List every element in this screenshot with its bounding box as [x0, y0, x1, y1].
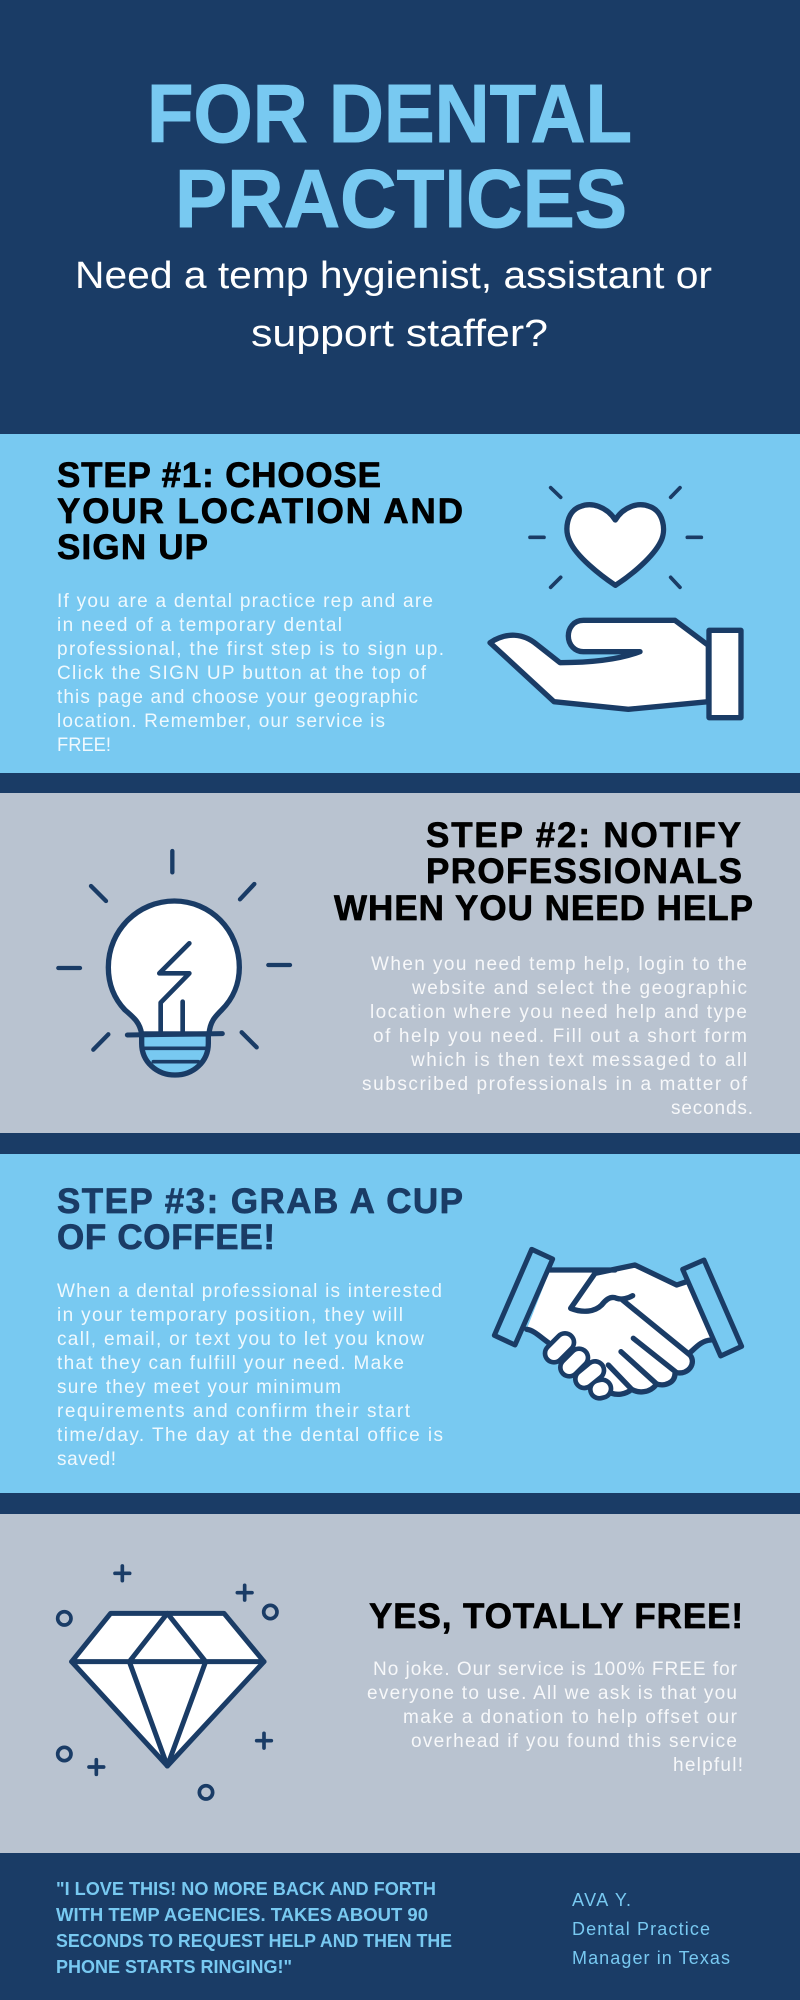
step 1 body text: location. Remember, our service is	[57, 711, 385, 732]
panel: header	[0, 0, 800, 434]
step 2 heading	[334, 816, 753, 928]
step 3 body text: When a dental professional is interested	[57, 1281, 442, 1302]
step 3 body text: requirements and confirm their start	[57, 1401, 411, 1422]
free body text: helpful!	[673, 1755, 743, 1776]
step 1 body text: Click the SIGN UP button at the top of	[57, 663, 427, 684]
step 2 body text: location where you need help and type	[370, 1002, 747, 1023]
testimonial quote: "I LOVE THIS! NO MORE BACK AND FORTH	[56, 1879, 436, 1899]
step 2 body text: which is then text messaged to all	[410, 1050, 747, 1071]
subtitle	[75, 255, 712, 355]
icon: light bulb	[58, 851, 290, 1075]
free body text: everyone to use. All we ask is that you	[367, 1683, 737, 1704]
testimonial author: AVA Y.	[572, 1890, 631, 1910]
testimonial author	[572, 1890, 730, 1968]
step 2 heading: WHEN YOU NEED HELP	[334, 889, 753, 928]
step 3 body text: time/day. The day at the dental office is	[57, 1425, 443, 1446]
step 3 body text: saved!	[57, 1449, 116, 1470]
step 2 body text: When you need temp help, login to the	[371, 954, 747, 975]
testimonial author: Dental Practice	[572, 1919, 710, 1939]
title: PRACTICES	[175, 152, 627, 245]
testimonial author: Manager in Texas	[572, 1948, 730, 1968]
step 1 heading	[57, 456, 463, 567]
testimonial quote: SECONDS TO REQUEST HELP AND THEN THE	[56, 1931, 452, 1951]
step 3 body text: sure they meet your minimum	[57, 1377, 341, 1398]
step 1 body text: If you are a dental practice rep and are	[57, 591, 433, 612]
free body text: make a donation to help offset our	[403, 1707, 738, 1728]
step 2 body text: seconds.	[671, 1098, 753, 1119]
step 1 heading: SIGN UP	[57, 528, 208, 567]
panel: totally free	[0, 1514, 800, 1853]
free heading: YES, TOTALLY FREE!	[369, 1597, 743, 1636]
step 2 body text	[362, 954, 753, 1119]
panel: step 3	[0, 1154, 800, 1493]
free body text: No joke. Our service is 100% FREE for	[373, 1659, 738, 1680]
step 3 heading	[57, 1182, 463, 1257]
step 1 body text: professional, the first step is to sign up.	[57, 639, 444, 660]
testimonial quote: WITH TEMP AGENCIES. TAKES ABOUT 90	[56, 1905, 428, 1925]
step 3 body text: that they can fulfill your need. Make	[57, 1353, 404, 1374]
step 1 heading: YOUR LOCATION AND	[57, 492, 463, 531]
step 3 heading: OF COFFEE!	[57, 1218, 275, 1257]
icon: hand holding heart	[490, 488, 741, 718]
panel: step 1	[0, 434, 800, 773]
step 3 body text: in your temporary position, they will	[57, 1305, 403, 1326]
step 1 heading: STEP #1: CHOOSE	[57, 456, 381, 495]
step 1 body text: this page and choose your geographic	[57, 687, 418, 708]
title	[147, 67, 632, 245]
free body text	[367, 1659, 743, 1776]
title: FOR DENTAL	[147, 67, 632, 160]
step 3 heading: STEP #3: GRAB A CUP	[57, 1182, 463, 1221]
free body text: overhead if you found this service	[411, 1731, 737, 1752]
panel: step 2	[0, 793, 800, 1133]
step 2 body text: subscribed professionals in a matter of	[362, 1074, 748, 1095]
icon: diamond	[58, 1566, 277, 1799]
testimonial quote	[56, 1879, 452, 1977]
step 1 body text	[57, 591, 444, 756]
step 2 body text: of help you need. Fill out a short form	[373, 1026, 747, 1047]
subtitle: support staffer?	[251, 313, 548, 355]
step 2 body text: website and select the geographic	[411, 978, 747, 999]
step 1 body text: FREE!	[57, 735, 111, 756]
step 1 body text: in need of a temporary dental	[57, 615, 342, 636]
step 2 heading: PROFESSIONALS	[426, 852, 742, 891]
step 2 heading: STEP #2: NOTIFY	[426, 816, 741, 855]
subtitle: Need a temp hygienist, assistant or	[75, 255, 712, 297]
panel: testimonial	[0, 1853, 800, 2000]
step 3 body text	[57, 1281, 443, 1470]
icon: handshake	[494, 1249, 742, 1394]
step 3 body text: call, email, or text you to let you know	[57, 1329, 424, 1350]
testimonial quote: PHONE STARTS RINGING!"	[56, 1957, 292, 1977]
